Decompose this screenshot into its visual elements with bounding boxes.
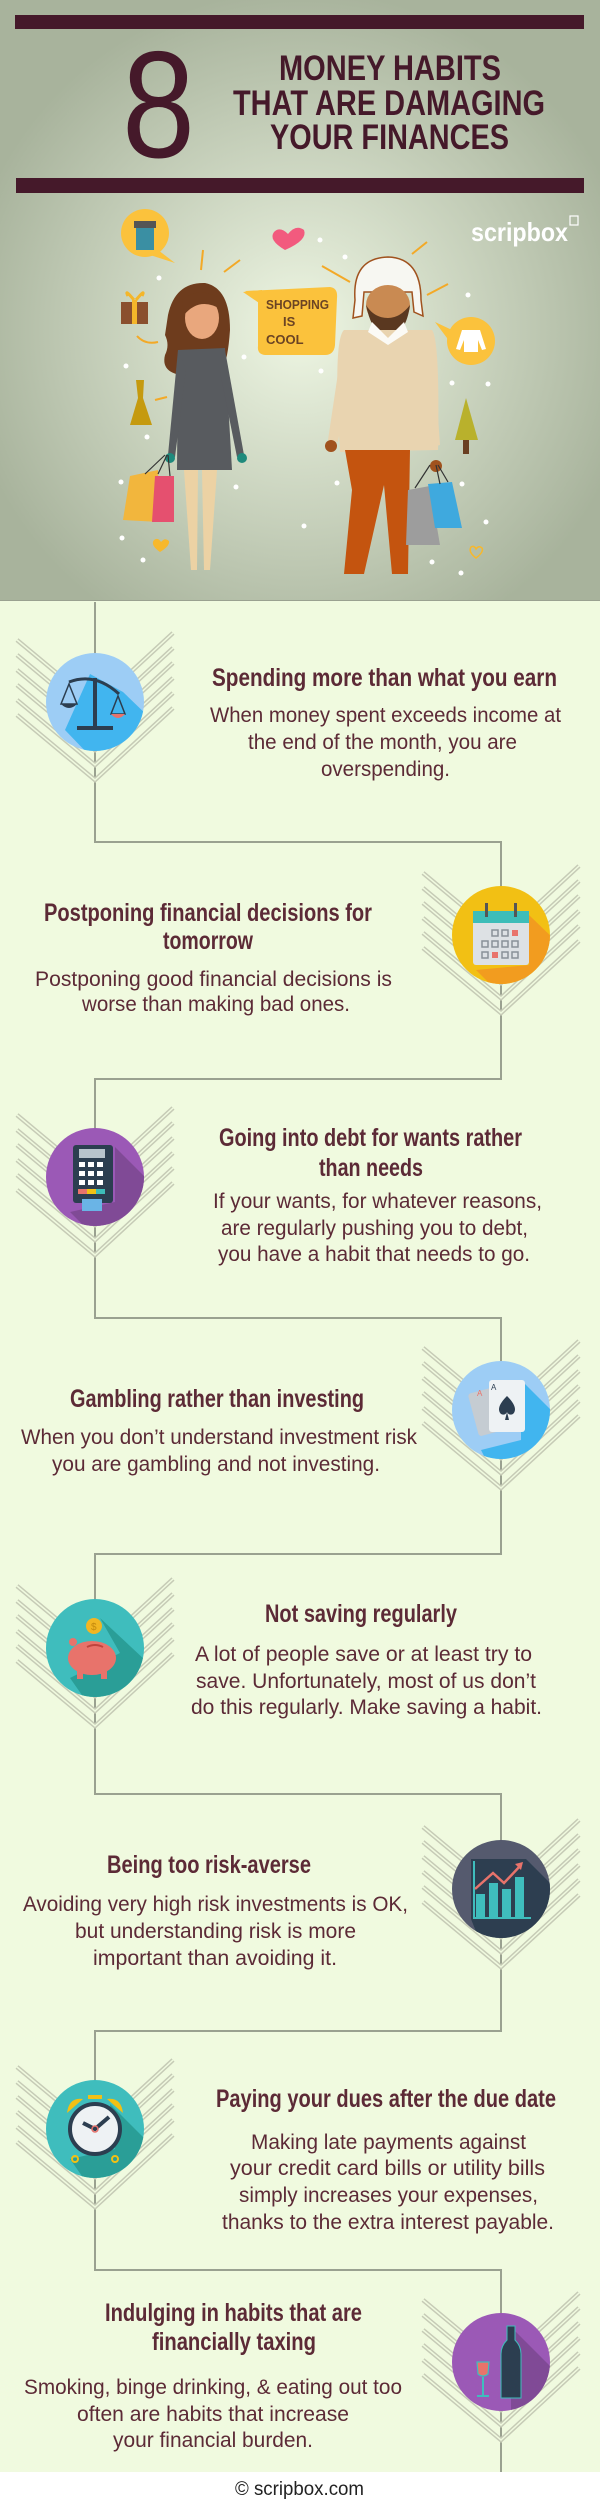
shop bubble [121, 209, 175, 263]
header: title: THAT ARE DAMAGING [233, 84, 545, 123]
illustration: shopping couple [118, 209, 495, 576]
text: item 3: If your wants, for whatever reasons, [213, 1190, 542, 1213]
heart [272, 228, 305, 250]
text: item 4: When you don’t understand investment risk [21, 1426, 417, 1449]
item 5: not saving [17, 1579, 542, 1728]
text: item 6: Being too risk-averse [107, 1851, 311, 1879]
snow dots [118, 238, 490, 576]
footer [0, 2472, 600, 2507]
text: item 1: When money spent exceeds income at [210, 704, 561, 727]
text: item 1 [210, 664, 561, 781]
text: item 6: important than avoiding it. [93, 1947, 337, 1970]
text: item 8 [24, 2299, 402, 2452]
text: item 6: Avoiding very high risk investments is OK, [23, 1893, 408, 1916]
item 8: indulging habits [24, 2293, 581, 2452]
text: item 3 [213, 1124, 542, 1266]
text: item 2 [35, 899, 392, 1016]
text: item 1: the end of the month, you are [248, 731, 517, 754]
text: item 8: your financial burden. [113, 2429, 313, 2452]
text: item 2: Postponing financial decisions for [44, 899, 372, 927]
text: item 7: Making late payments against [251, 2131, 526, 2154]
tree [455, 398, 478, 454]
text: item 6: but understanding risk is more [75, 1920, 356, 1943]
text: item 3: Going into debt for wants rather [219, 1124, 522, 1152]
text: item 7: thanks to the extra interest payable. [222, 2211, 554, 2234]
text: item 5: save. Unfortunately, most of us don’t [196, 1670, 536, 1693]
shirt bubble [435, 317, 495, 365]
small hearts [153, 539, 169, 552]
item 7: late dues [17, 2060, 556, 2234]
text: item 8: Smoking, binge drinking, & eating out too [24, 2376, 402, 2399]
text: item 7: your credit card bills or utility bills [230, 2157, 545, 2180]
text: item 2: tomorrow [163, 927, 253, 955]
item 6: risk averse [23, 1820, 581, 1970]
text: item 8: Indulging in habits that are [105, 2299, 362, 2327]
header background [0, 0, 600, 600]
item 4: gambling [21, 1341, 581, 1490]
header: title: YOUR FINANCES [270, 118, 509, 157]
header: top bar [15, 15, 584, 29]
text: item 1: overspending. [321, 758, 450, 781]
icon: playing cards: A [491, 1383, 497, 1392]
icon: playing cards: A [477, 1389, 483, 1398]
text: item 2: Postponing good financial decisions is [35, 968, 392, 991]
icon: calendar [452, 886, 550, 984]
icon: wine bottle [452, 2313, 550, 2411]
divider under header [0, 600, 600, 602]
icon: piggy bank: $ [91, 1622, 97, 1633]
icon: alarm clock [46, 2080, 144, 2178]
text: item 8: often are habits that increase [77, 2403, 349, 2426]
header: number 8: 8 [122, 20, 195, 190]
arrows/strokes [137, 242, 448, 400]
text: item 5: do this regularly. Make saving a habit. [191, 1696, 542, 1719]
logo: scripbox: scripbox [471, 217, 568, 247]
header: title [233, 49, 545, 157]
man [325, 257, 462, 574]
speech bubble shopping is cool [243, 287, 337, 355]
timeline connector [95, 602, 501, 2472]
header: bottom bar [16, 178, 584, 193]
text: item 4: Gambling rather than investing [70, 1385, 364, 1413]
icon: scales [46, 653, 144, 751]
icon: bar chart [452, 1840, 550, 1938]
item 2: postponing decisions [35, 866, 581, 1016]
text: item 5: Not saving regularly [265, 1600, 457, 1628]
text: item 4 [21, 1385, 417, 1476]
text: item 4: you are gambling and not investing. [52, 1453, 380, 1476]
text: item 2: worse than making bad ones. [81, 993, 350, 1016]
icon: card machine [46, 1128, 144, 1226]
text: item 3: than needs [319, 1154, 423, 1182]
speech bubble shopping is cool: SHOPPING [266, 297, 329, 312]
text: item 7: simply increases your expenses, [239, 2184, 538, 2207]
text: item 5: A lot of people save or at least try to [195, 1643, 532, 1666]
dress [130, 380, 152, 425]
text: item 5 [191, 1600, 542, 1719]
icon: piggy bank [46, 1599, 144, 1697]
text: item 7 [216, 2085, 556, 2234]
speech bubble shopping is cool: COOL [266, 332, 304, 347]
icon: playing cards [452, 1361, 550, 1459]
item 1: spending more than you earn [17, 633, 561, 782]
woman [123, 283, 247, 570]
text: item 8: financially taxing [152, 2328, 316, 2356]
footer: © scripbox.com [235, 2479, 364, 2500]
header: title: MONEY HABITS [279, 49, 501, 88]
gift [121, 293, 148, 324]
speech bubble shopping is cool: IS [283, 314, 296, 329]
text: item 3: are regularly pushing you to debt, [221, 1217, 528, 1240]
text: item 3: you have a habit that needs to go. [218, 1243, 530, 1266]
item 3: debt for wants [17, 1108, 542, 1266]
text: item 6 [23, 1851, 408, 1970]
